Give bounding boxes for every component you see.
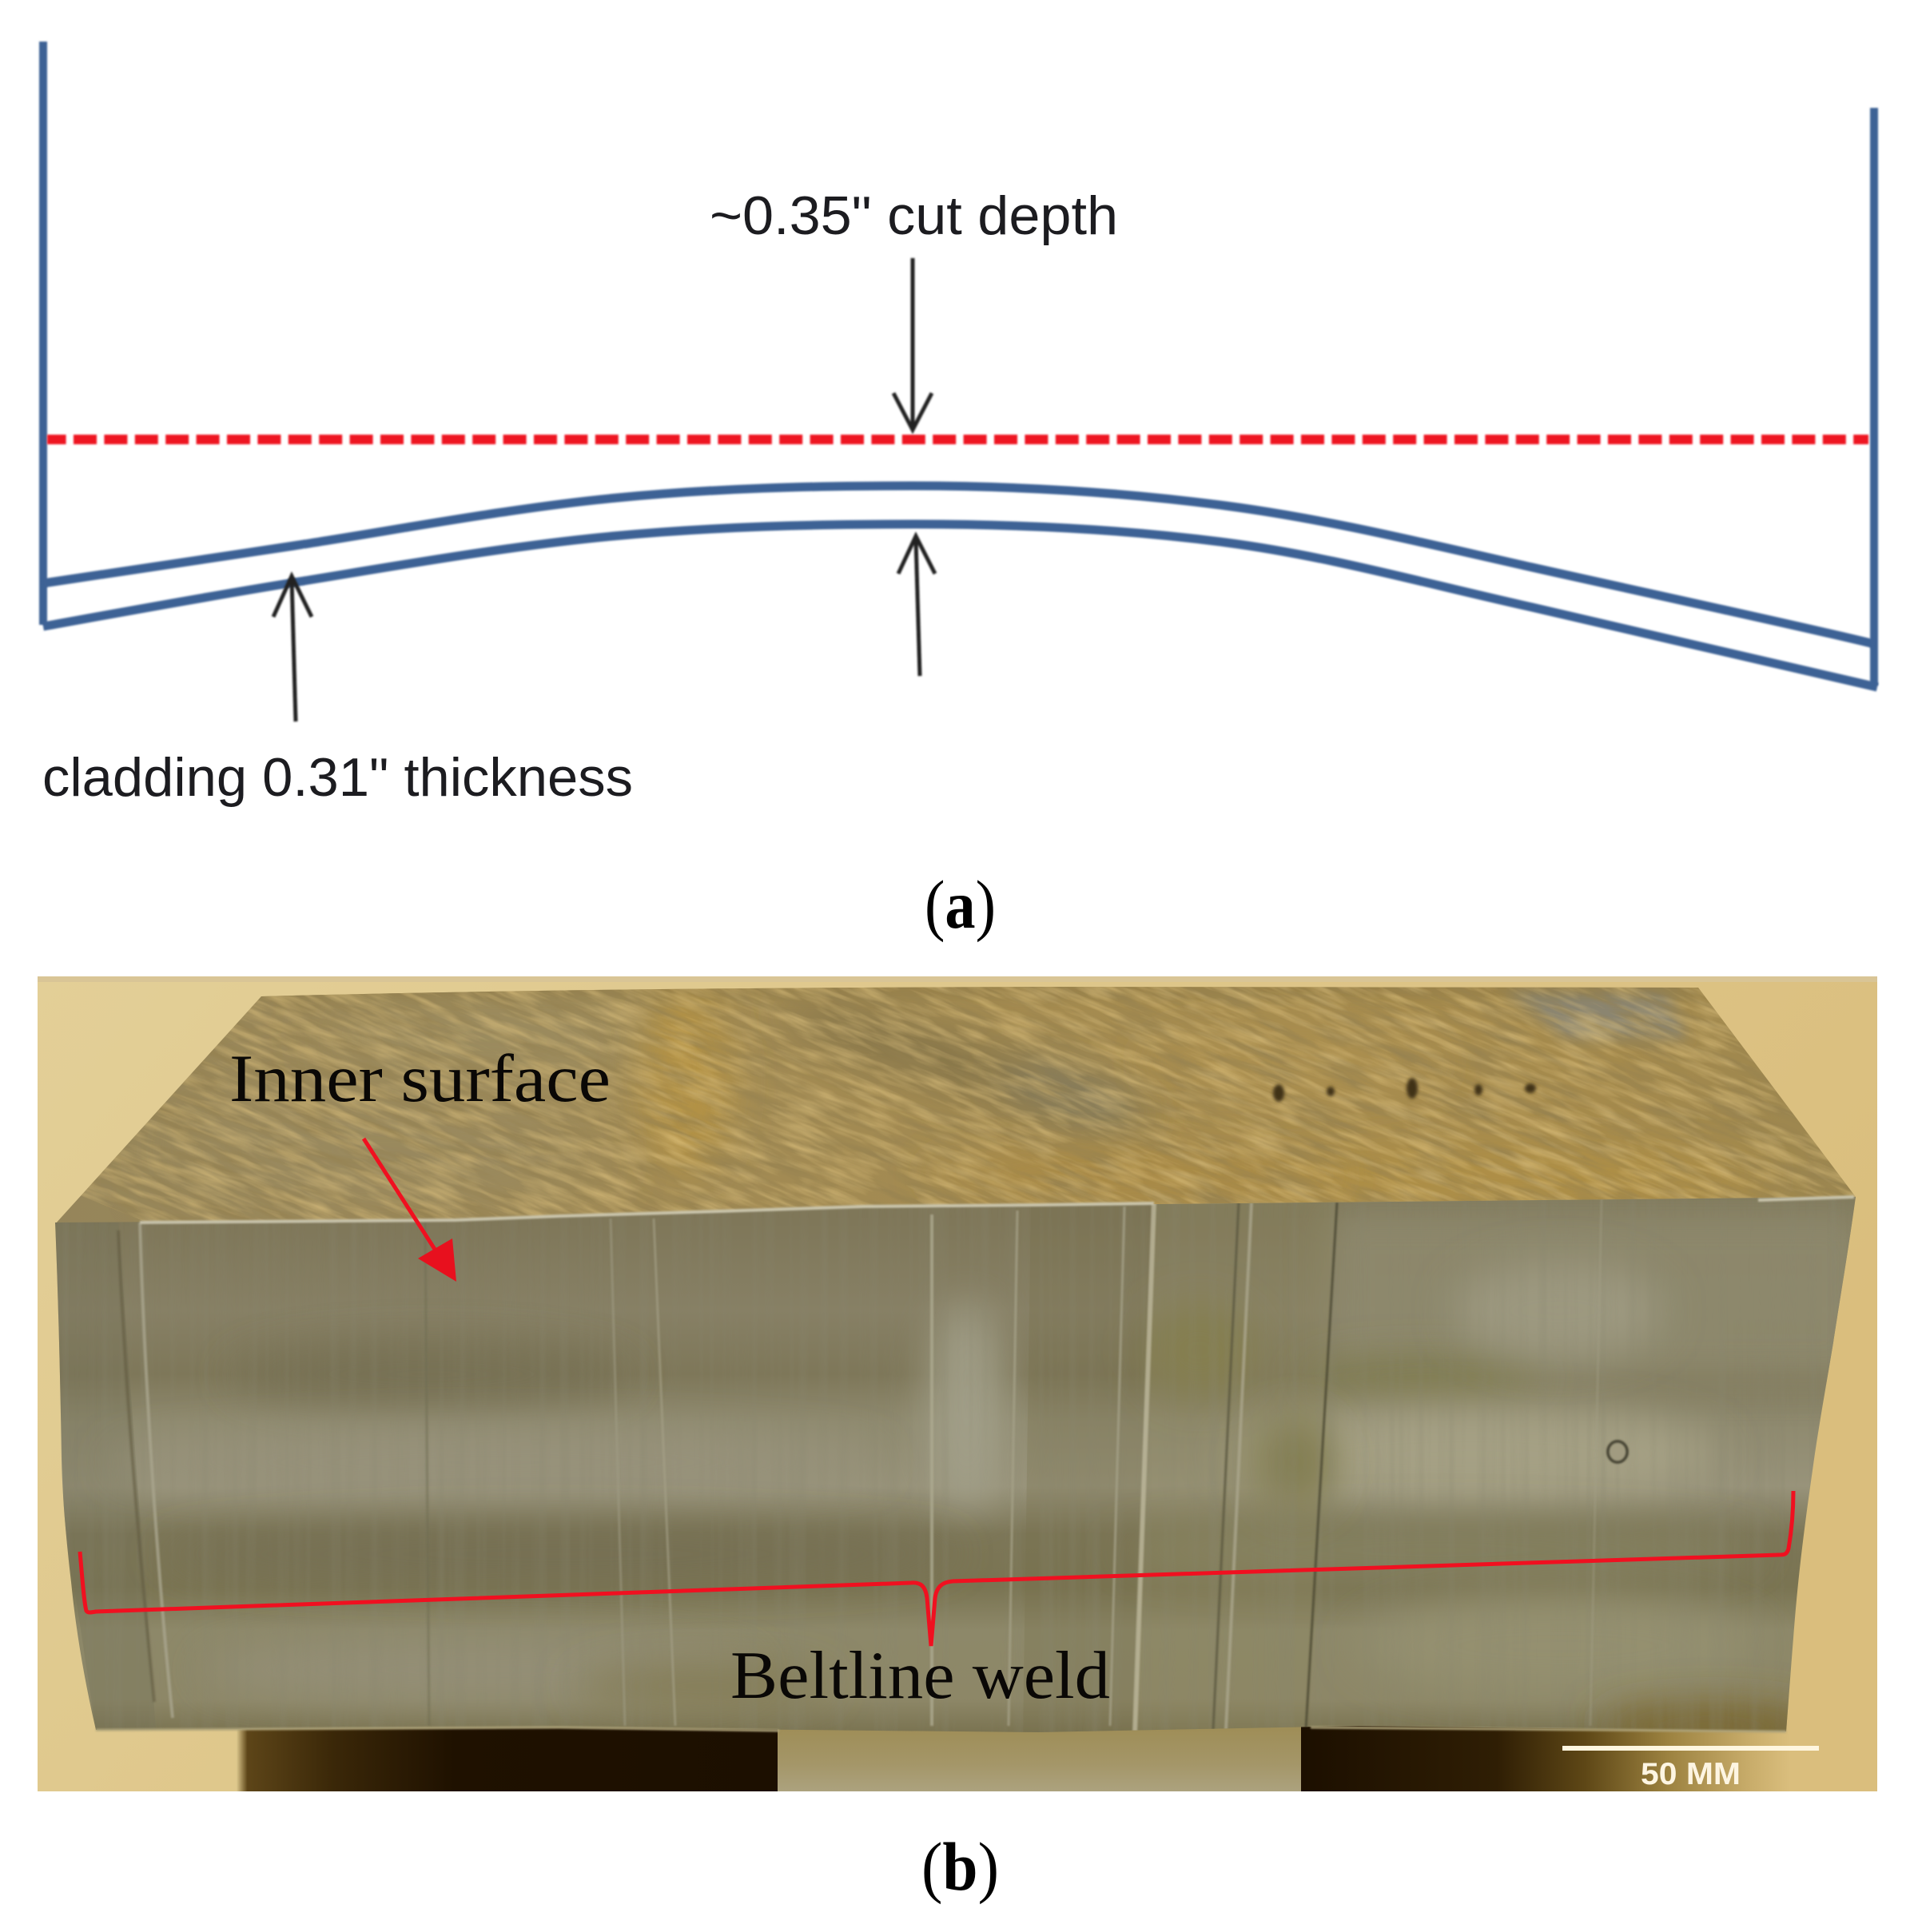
dark diagonal swath <box>799 1001 1136 1131</box>
arrow: cladding thickness left <box>273 576 312 722</box>
weld panel olive stains <box>1143 1302 1255 1398</box>
bracket: beltline weld extent <box>80 1491 1793 1646</box>
grey upper left area <box>176 1095 591 1207</box>
block top surface (rusted) <box>57 987 1856 1222</box>
left wall line <box>39 42 47 625</box>
grey upper right patch <box>1502 989 1686 1039</box>
arrow: inner surface <box>364 1139 456 1282</box>
label: inner surface: Inner surface <box>229 1041 611 1116</box>
shadow and pedestal under the block <box>237 1726 1773 1791</box>
photo backdrop <box>38 976 1877 1791</box>
rust grain <box>116 987 1797 1214</box>
arrow: cladding thickness center <box>898 536 935 676</box>
panel a: cladding cut diagram <box>42 42 1877 943</box>
warm base shading at right <box>1598 1705 1822 1747</box>
right wall line <box>1870 108 1878 686</box>
left side tones <box>232 1342 631 1406</box>
label: cladding thickness: cladding 0.31" thickness <box>42 747 633 808</box>
caption b: (b) <box>921 1828 999 1905</box>
orange diagonal swath <box>641 998 732 1162</box>
bright vertical patch <box>927 1302 1007 1510</box>
block front face (machined surface) <box>48 1191 1870 1747</box>
label: beltline weld: Beltline weld <box>730 1638 1110 1713</box>
lower cladding curve <box>43 524 1877 687</box>
scale bar: 50 MM <box>1641 1757 1741 1791</box>
scale bar <box>1562 1746 1819 1791</box>
caption a: (a) <box>925 866 996 943</box>
left dark end strip <box>55 1226 152 1700</box>
surface pits <box>1273 1078 1536 1102</box>
upper cladding curve <box>43 486 1874 644</box>
weld panel <box>1133 1201 1336 1734</box>
warm right area <box>1151 1031 1439 1095</box>
right side tones <box>1327 1207 1870 1382</box>
red dashed cut line <box>47 435 1868 444</box>
panel b: weld block photograph <box>38 976 1877 1791</box>
arrow: cut depth <box>893 258 932 430</box>
block top edge highlight <box>140 1197 1854 1222</box>
block bottom edge highlight <box>96 1727 1786 1731</box>
hole mark <box>1608 1441 1627 1462</box>
label: cut depth: ~0.35" cut depth <box>710 185 1118 246</box>
machining grooves <box>118 1199 1602 1732</box>
